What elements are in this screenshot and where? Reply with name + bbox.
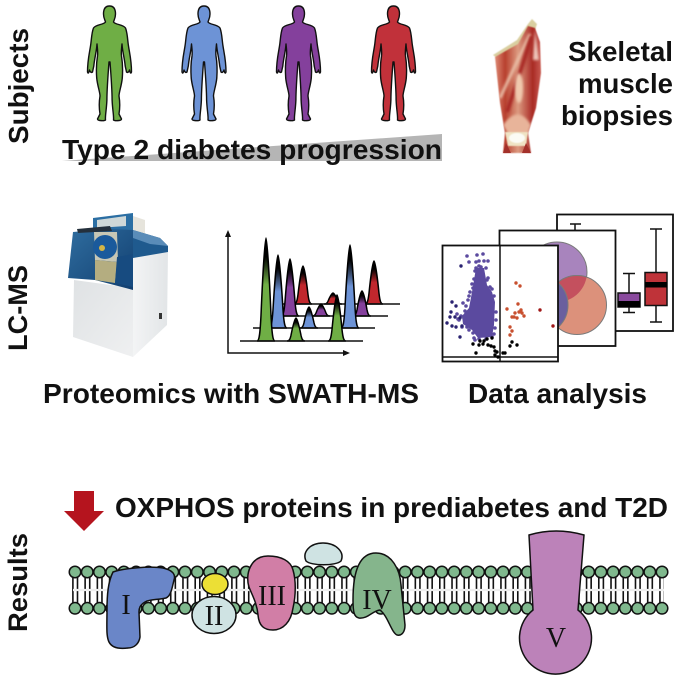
complex IV xyxy=(353,553,405,635)
complex IV: IV xyxy=(362,585,392,616)
cytochrome c xyxy=(305,543,342,565)
complex I xyxy=(107,567,175,648)
label: Skeletal muscle biopsies: muscle xyxy=(578,68,673,99)
arrow: decrease xyxy=(64,491,104,531)
lipid bilayer xyxy=(72,572,664,608)
peaks: red series xyxy=(282,261,400,304)
icon: purple body xyxy=(276,6,320,121)
complex II xyxy=(192,574,236,634)
panel: subject silhouettes xyxy=(88,6,416,121)
label: Skeletal muscle biopsies: Skeletal xyxy=(568,36,673,67)
peaks: green series xyxy=(240,238,363,341)
peaks: blue series xyxy=(253,245,375,328)
label: Proteomics with SWATH-MS: Proteomics with SWATH-MS xyxy=(43,378,419,409)
chart axes xyxy=(225,230,350,356)
complex III xyxy=(248,556,295,630)
peaks: purple series xyxy=(265,259,388,316)
icon: mass spectrometer xyxy=(68,213,168,357)
label: Skeletal muscle biopsies xyxy=(561,36,673,131)
label: Results: Results xyxy=(3,533,33,632)
label: Data analysis: Data analysis xyxy=(468,378,647,409)
panel: box plots xyxy=(557,214,673,331)
heading: Type 2 diabetes progression: Type 2 diabetes progression xyxy=(62,134,442,165)
panel: volcano scatter plot xyxy=(442,245,558,362)
chart: data analysis stacked panels xyxy=(442,214,673,362)
label: Subjects: Subjects xyxy=(3,28,34,144)
chart: chromatogram peaks xyxy=(225,230,400,356)
icon: blue body xyxy=(182,6,226,121)
panel: Venn diagram xyxy=(500,230,616,346)
complex V xyxy=(519,531,591,674)
complex II: II xyxy=(205,601,223,632)
label: Skeletal muscle biopsies: biopsies xyxy=(561,100,673,131)
complex V: V xyxy=(546,623,566,654)
diagram: mitochondrial membrane xyxy=(72,531,664,674)
label: LC-MS: LC-MS xyxy=(3,265,33,351)
complex I: I xyxy=(121,590,131,621)
heading: OXPHOS proteins: OXPHOS proteins in prediabetes and T2D xyxy=(115,492,668,523)
icon: green body xyxy=(88,6,132,121)
progression wedge xyxy=(62,134,442,161)
icon: red body xyxy=(372,6,416,121)
complex III: III xyxy=(258,581,286,612)
icon: thigh muscle xyxy=(493,19,541,153)
